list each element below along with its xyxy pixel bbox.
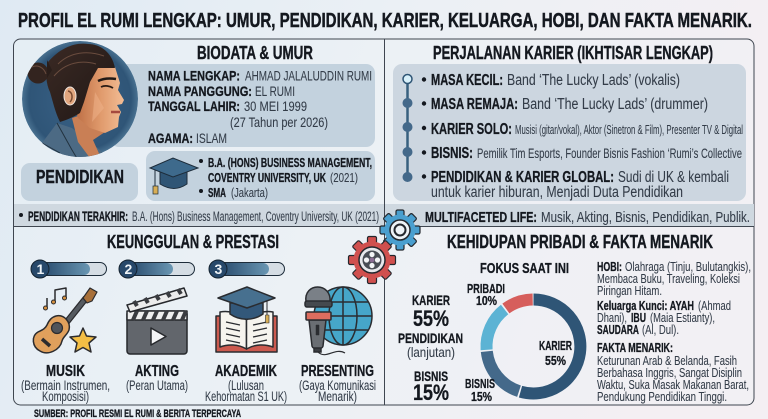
career stages: untuk karier hiburan, Menjadi Duta Pendidikan — [431, 184, 683, 201]
panel: personal life and facts — [398, 232, 751, 405]
progress indicator 2: 2 — [124, 261, 132, 277]
icon: graduation cap — [150, 158, 198, 194]
facts text block — [597, 259, 751, 404]
career stages — [422, 72, 743, 201]
panel: biodata and age — [19, 41, 379, 224]
progress indicator 1: 1 — [36, 261, 44, 277]
biodata text: NAMA PANGGUNG: — [148, 83, 252, 99]
category labels: (Gaya Komunikasi — [299, 378, 376, 393]
education label — [21, 163, 138, 201]
career stages: KARIER SOLO: — [431, 121, 512, 138]
career stages: Band ‘The Lucky Lads’ (drummer) — [522, 96, 708, 113]
career stages: Band ‘The Lucky Lads’ (vokalis) — [507, 72, 680, 89]
biodata text: TANGGAL LAHIR: — [148, 98, 240, 114]
focus summary numbers: BISNIS — [414, 368, 448, 384]
category labels: AKTING — [135, 363, 179, 380]
facts text block: (Ahmad — [698, 298, 731, 313]
facts text block: SAUDARA — [597, 322, 639, 337]
education card: (Jakarta) — [231, 185, 268, 200]
biodata text: ISLAM — [196, 130, 227, 146]
panel: career journey — [393, 43, 750, 226]
donut chart: PRIBADI — [467, 281, 505, 296]
timeline — [402, 74, 412, 182]
facts text block: (Al, Dul). — [642, 322, 679, 337]
donut chart: BISNIS — [465, 376, 495, 391]
progress indicator 2 — [119, 260, 194, 278]
panel: strengths and achievements — [21, 232, 376, 404]
focus summary numbers: 15% — [413, 380, 449, 405]
education card: (2021) — [330, 170, 358, 185]
focus summary numbers: KARIER — [412, 292, 450, 308]
facts text block: HOBI: — [597, 259, 622, 274]
portrait — [22, 41, 138, 160]
education card — [146, 151, 375, 201]
facts text block: Piringan Hitam. — [597, 283, 662, 298]
education card: SMA — [208, 185, 226, 200]
biodata card — [110, 64, 375, 147]
biodata text: EL RUMI — [255, 83, 295, 99]
latest education strip — [19, 209, 379, 224]
category labels: (Lulusan — [228, 378, 264, 393]
icon: red gear with film reel — [348, 236, 396, 284]
education card: B.A. (HONS) BUSINESS MANAGEMENT, — [208, 155, 372, 170]
focus summary numbers — [398, 292, 463, 405]
category labels: (Bermain Instrumen, — [21, 378, 110, 393]
latest education strip: B.A. (Hons) Business Management, Coventry University, UK (2021) — [132, 209, 379, 224]
focus summary numbers: 55% — [413, 306, 449, 331]
category labels: MUSIK — [46, 363, 86, 380]
focus summary numbers: PENDIDIKAN — [398, 330, 463, 346]
multifaceted life strip: MULTIFACETED LIFE: — [425, 209, 537, 226]
education card: COVENTRY UNIVERSITY, UK — [208, 170, 326, 185]
icon: book and graduation cap — [216, 287, 277, 352]
donut chart: 10% — [476, 293, 497, 308]
facts text block: Dhani), — [597, 310, 627, 325]
focus summary numbers: (lanjutan) — [407, 344, 455, 360]
progress indicator 3 — [209, 260, 284, 278]
multifaceted life strip — [425, 209, 750, 226]
biodata text: 30 MEI 1999 — [244, 98, 307, 114]
facts text block: (Maia Estianty), — [650, 310, 715, 325]
icon: film clapperboard — [127, 288, 187, 354]
icon: microphone and globe — [305, 287, 372, 355]
category labels: Menarik) — [318, 389, 357, 404]
category labels: Komposisi) — [42, 389, 89, 404]
icon: blue gear — [380, 210, 420, 250]
career stages: BISNIS: — [431, 145, 473, 162]
category labels: AKADEMIK — [215, 363, 278, 380]
facts text block: IBU — [631, 310, 646, 325]
career stages: Sudi di UK & kembali — [618, 169, 729, 186]
heading: strengths: KEUNGGULAN & PRESTASI — [107, 232, 279, 252]
category labels — [21, 363, 376, 404]
biodata text: AHMAD JALALUDDIN RUMI — [245, 68, 372, 84]
biodata text: NAMA LENGKAP: — [148, 68, 240, 84]
career card — [393, 64, 746, 201]
progress indicator 3: 3 — [214, 261, 222, 277]
donut chart: KARIER — [539, 338, 572, 353]
facts text block: Keluarga Kunci: AYAH — [597, 298, 694, 313]
donut chart: FOKUS SAAT INI — [480, 260, 569, 277]
biodata text: (27 Tahun per 2026) — [230, 114, 328, 130]
donut chart: 55% — [545, 353, 566, 368]
latest education strip: PENDIDIKAN TERAKHIR: — [28, 209, 128, 224]
donut chart — [465, 260, 580, 404]
heading: biodata: BIODATA & UMUR — [197, 43, 313, 63]
category labels: PRESENTING — [301, 363, 374, 380]
career stages: MASA KECIL: — [431, 72, 503, 89]
career stages: PENDIDIKAN & KARIER GLOBAL: — [431, 169, 614, 186]
biodata text: AGAMA: — [148, 130, 193, 146]
career stages: MASA REMAJA: — [431, 96, 518, 113]
category labels: (Peran Utama) — [126, 378, 188, 393]
progress indicator 1 — [31, 260, 106, 278]
education label: PENDIDIKAN — [36, 167, 124, 187]
biodata text — [148, 68, 372, 146]
facts text block: Pendukung Pendidikan Tinggi. — [597, 389, 727, 404]
facts text block: FAKTA MENARIK: — [597, 340, 673, 355]
donut chart: 15% — [471, 389, 492, 404]
category labels: Kehormatan S1 UK) — [205, 389, 287, 404]
icon: guitar with notes and star — [33, 288, 97, 353]
